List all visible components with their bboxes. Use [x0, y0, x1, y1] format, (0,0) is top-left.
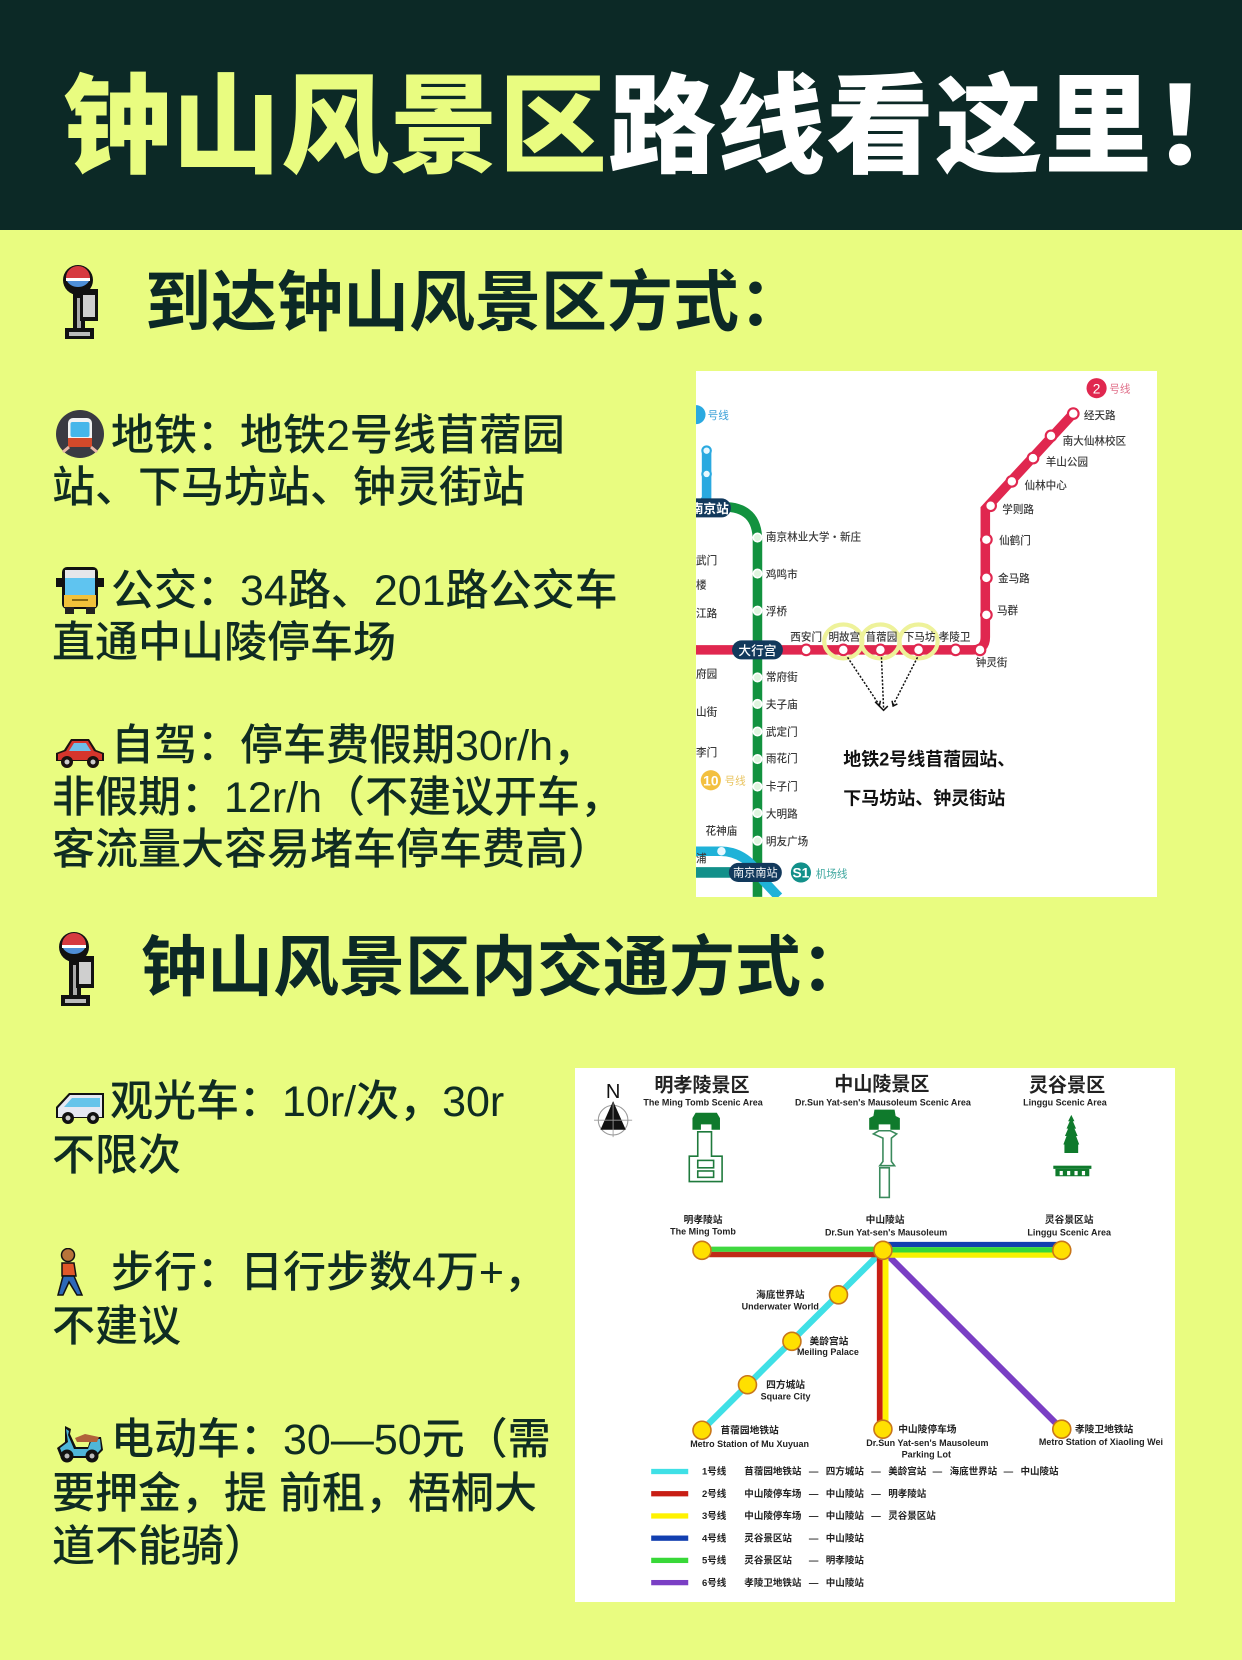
- icon: Ming tomb: [689, 1113, 722, 1182]
- area headings: 灵谷景区: [1029, 1075, 1105, 1097]
- interchange pills: [678, 498, 783, 882]
- station labels: 卡子门: [766, 780, 798, 793]
- station labels: 李门: [696, 746, 717, 759]
- station labels: 明孝陵站: [684, 1213, 723, 1226]
- legend: —: [871, 1467, 881, 1478]
- legend: —: [871, 1489, 881, 1500]
- block: sightseeing bus: 观光车：10r/次，30r: [110, 1078, 504, 1126]
- station labels: 夫子庙: [766, 698, 798, 711]
- station labels: 海底世界站: [756, 1288, 805, 1301]
- block: walking: 不建议: [52, 1302, 181, 1350]
- legend: 1号线: [702, 1466, 727, 1478]
- stations: [693, 1241, 1071, 1439]
- legend: 灵谷景区站: [888, 1510, 936, 1522]
- block: e-bike: 电动车：30—50元（需: [111, 1416, 551, 1464]
- map caption: 地铁2号线苜蓿园站、: [843, 748, 1015, 769]
- area subtitles: Linggu Scenic Area: [1023, 1097, 1108, 1107]
- legend: [651, 1466, 1059, 1589]
- block: e-bike: 要押金，提 前租，梧桐大: [52, 1470, 537, 1518]
- icon: bus stop sign 1: [63, 265, 98, 339]
- legend: 中山陵停车场: [744, 1488, 802, 1500]
- block: metro: [52, 410, 565, 512]
- station labels: 经天路: [1084, 409, 1116, 422]
- station labels: 明故宫: [828, 630, 860, 643]
- station labels: 武定门: [766, 726, 798, 739]
- block: walking: [52, 1248, 547, 1350]
- station labels: Square City: [761, 1392, 811, 1402]
- line badges: S1: [792, 866, 810, 881]
- area headings: 中山陵景区: [834, 1074, 929, 1096]
- legend: 中山陵站: [826, 1532, 864, 1544]
- line badges: 10: [703, 774, 719, 789]
- line badges: 号线: [725, 774, 746, 787]
- icon: Sun Yat-sen mausoleum: [869, 1110, 900, 1197]
- station labels: Underwater World: [742, 1302, 819, 1312]
- line badges: 号线: [708, 409, 729, 422]
- green line 3: [702, 507, 762, 897]
- station labels: 花神庙: [706, 824, 737, 837]
- panel: scenic area shuttle map: [575, 1068, 1175, 1602]
- area subtitles: [643, 1097, 1108, 1107]
- station labels: [670, 1213, 1163, 1460]
- legend: 苜蓿园地铁站: [744, 1466, 802, 1478]
- legend: 四方城站: [826, 1466, 864, 1478]
- legend: 海底世界站: [950, 1466, 998, 1478]
- heading: how to reach: 到达钟山风景区方式：: [145, 265, 805, 339]
- area headings: [654, 1074, 1105, 1097]
- block: driving: [52, 722, 623, 874]
- title: 钟山风景区路线看这里！: [63, 66, 1242, 187]
- legend: —: [809, 1467, 819, 1478]
- station labels: 中山陵停车场: [898, 1422, 957, 1435]
- station labels: 浮桥: [766, 605, 788, 618]
- block: sightseeing bus: 不限次: [52, 1132, 181, 1180]
- heading: inside transport: 钟山风景区内交通方式：: [141, 930, 867, 1004]
- legend: 中山陵站: [1021, 1466, 1059, 1478]
- map caption: 下马坊站、钟灵街站: [843, 788, 1005, 809]
- station labels: Meiling Palace: [797, 1347, 859, 1357]
- station labels: Parking Lot: [902, 1450, 951, 1460]
- icon: bus: [56, 567, 104, 614]
- station labels: 苜蓿园地铁站: [720, 1423, 779, 1436]
- station labels: 仙林中心: [1025, 479, 1067, 492]
- station labels: Metro Station of Xiaoling Wei: [1039, 1437, 1163, 1447]
- legend: —: [809, 1489, 819, 1500]
- line badges: 2: [1093, 381, 1100, 396]
- block: bus: 公交：34路、201路公交车: [111, 567, 618, 615]
- block: bus: [52, 567, 618, 667]
- legend: 中山陵站: [826, 1488, 864, 1500]
- legend: —: [871, 1511, 881, 1522]
- icon: car: [56, 739, 104, 768]
- station labels: 孝陵卫: [939, 630, 971, 643]
- legend: 美龄宫站: [888, 1466, 927, 1478]
- station labels: 西安门: [790, 630, 822, 643]
- header band: [0, 0, 1242, 230]
- station labels: 四方城站: [766, 1378, 805, 1391]
- station labels: Metro Station of Mu Xuyuan: [690, 1439, 809, 1449]
- block: e-bike: [52, 1416, 551, 1571]
- compass: [594, 1081, 632, 1137]
- station labels: 府园: [696, 667, 717, 680]
- station labels: 楼: [696, 578, 707, 591]
- legend: 孝陵卫地铁站: [744, 1577, 802, 1589]
- legend: 4号线: [702, 1532, 727, 1544]
- blue line 1: [696, 446, 779, 897]
- icon: Linggu pagoda: [1053, 1115, 1091, 1176]
- block: metro: 地铁：地铁2号线苜蓿园: [111, 412, 565, 460]
- interchange pills: 南京南站: [733, 866, 778, 880]
- station labels: Linggu Scenic Area: [1027, 1228, 1112, 1238]
- legend: 明孝陵站: [826, 1555, 864, 1567]
- legend: 中山陵停车场: [744, 1510, 802, 1522]
- station labels: 下马坊: [904, 630, 936, 643]
- station labels: 浦: [696, 852, 707, 865]
- legend: —: [809, 1511, 819, 1522]
- legend: 6号线: [702, 1577, 727, 1589]
- block: metro: 站、下马坊站、钟灵街站: [52, 464, 525, 512]
- block: sightseeing bus: [52, 1078, 504, 1180]
- legend: —: [1004, 1467, 1014, 1478]
- block: walking: 步行：日行步数4万+，: [111, 1249, 547, 1297]
- station labels: 羊山公园: [1046, 455, 1088, 468]
- block: bus: 直通中山陵停车场: [52, 619, 396, 667]
- red line 2: [696, 408, 1079, 655]
- station labels: [696, 409, 1127, 865]
- station labels: 山街: [696, 706, 718, 719]
- legend: —: [809, 1578, 819, 1589]
- station labels: 南大仙林校区: [1063, 434, 1127, 447]
- station labels: 金马路: [998, 572, 1030, 585]
- station labels: 中山陵站: [866, 1213, 905, 1226]
- legend: 2号线: [702, 1488, 727, 1500]
- shuttle route lines: [702, 1245, 1062, 1430]
- station labels: Dr.Sun Yat-sen's Mausoleum: [825, 1228, 947, 1238]
- legend: —: [809, 1556, 819, 1567]
- station labels: 南京林业大学・新庄: [766, 531, 862, 544]
- station labels: 灵谷景区站: [1045, 1213, 1094, 1226]
- legend: 5号线: [702, 1555, 727, 1567]
- station labels: 苜蓿园: [866, 630, 897, 643]
- line badges: [686, 378, 1131, 883]
- station labels: Dr.Sun Yat-sen's Mausoleum: [866, 1438, 989, 1448]
- map caption: [843, 748, 1015, 809]
- legend: 灵谷景区站: [744, 1532, 792, 1544]
- interchange pills: 大行宫: [738, 643, 777, 658]
- station labels: 钟灵街: [976, 656, 1008, 669]
- legend: 中山陵站: [826, 1510, 864, 1522]
- station labels: 孝陵卫地铁站: [1075, 1422, 1134, 1435]
- icon: bus stop sign 2: [59, 932, 94, 1006]
- block: driving: 非假期：12r/h（不建议开车，: [52, 774, 623, 822]
- station labels: 常府街: [766, 671, 798, 684]
- legend: 明孝陵站: [888, 1488, 927, 1500]
- block: driving: 自驾：停车费假期30r/h，: [111, 722, 596, 770]
- legend: 灵谷景区站: [744, 1555, 792, 1567]
- line badges: 号线: [1109, 382, 1131, 395]
- legend: —: [933, 1467, 943, 1478]
- area headings: 明孝陵景区: [654, 1075, 750, 1097]
- icon: metro: [56, 410, 104, 458]
- station labels: 学则路: [1002, 503, 1034, 516]
- area subtitles: The Ming Tomb Scenic Area: [643, 1097, 764, 1107]
- legend: 3号线: [702, 1510, 727, 1522]
- station labels: 明友广场: [766, 835, 809, 848]
- station labels: 仙鹤门: [999, 534, 1031, 547]
- legend: —: [809, 1533, 819, 1544]
- compass: N: [606, 1081, 620, 1103]
- icon: walker: [57, 1248, 84, 1296]
- legend: 中山陵站: [826, 1577, 864, 1589]
- station labels: 武门: [696, 554, 717, 567]
- block: e-bike: 道不能骑）: [52, 1523, 267, 1571]
- highlighted stations: [824, 624, 938, 710]
- station labels: The Ming Tomb: [670, 1226, 736, 1236]
- panel: metro line 2 map: [696, 371, 1157, 897]
- station labels: 马群: [997, 604, 1019, 617]
- station labels: 江路: [696, 607, 718, 620]
- station labels: 美龄宫站: [810, 1335, 849, 1348]
- station labels: 鸡鸣市: [766, 568, 798, 581]
- area subtitles: Dr.Sun Yat-sen's Mausoleum Scenic Area: [795, 1097, 972, 1107]
- line badges: 机场线: [816, 868, 848, 881]
- station labels: 大明路: [766, 807, 798, 820]
- station labels: 雨花门: [766, 752, 798, 765]
- icon: scooter: [57, 1426, 103, 1462]
- block: driving: 客流量大容易堵车停车费高）: [52, 826, 611, 874]
- icon: van: [56, 1093, 104, 1124]
